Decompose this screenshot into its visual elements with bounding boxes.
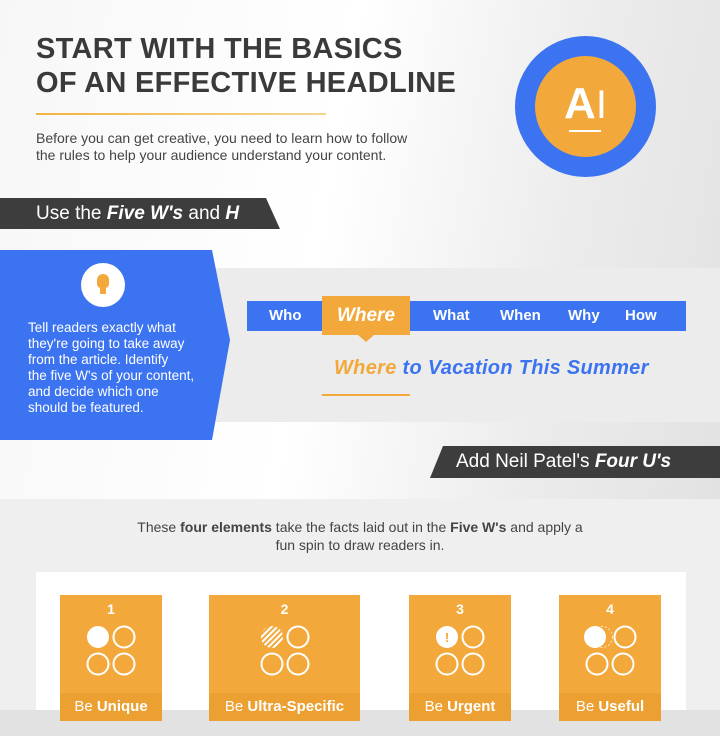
card 2: 2 <box>281 601 288 617</box>
four U's intro: These four elements take the facts laid out in the Five W's and apply a <box>137 519 583 535</box>
card 4 <box>559 595 661 721</box>
intro text: Before you can get creative, you need to learn how to follow <box>36 130 407 146</box>
tip text: the five W's of your content, <box>28 368 194 383</box>
card 4: 4 <box>606 601 614 617</box>
title <box>36 33 456 99</box>
card 1: Be Unique <box>74 698 148 715</box>
banner: Four U's <box>430 446 720 478</box>
icon: A text cursor: AI <box>564 79 607 128</box>
card 3: 3 <box>456 601 464 617</box>
four U's intro <box>137 519 583 553</box>
tip text: Tell readers exactly what <box>28 320 176 335</box>
white panel <box>36 572 686 712</box>
card 3: ! <box>445 630 449 645</box>
icon: A text cursor <box>515 36 656 177</box>
tip text: and decide which one <box>28 384 159 399</box>
tab bar: What <box>433 307 470 324</box>
gray section <box>0 499 720 736</box>
card 1 <box>60 595 162 721</box>
intro text: the rules to help your audience understand your content. <box>36 147 386 163</box>
card 3: Be Urgent <box>425 698 495 715</box>
banner: Five W's <box>0 198 280 229</box>
title: START WITH THE BASICS <box>36 33 403 65</box>
icon: lightbulb <box>81 263 125 307</box>
card 2: Be Ultra-Specific <box>225 698 344 715</box>
tip text: they're going to take away <box>28 336 184 351</box>
tab bar <box>247 301 686 331</box>
intro text <box>36 130 408 163</box>
card 3 <box>409 595 511 721</box>
panel: blue tip <box>0 250 232 440</box>
tip text: should be featured. <box>28 400 144 415</box>
tab bar: Why <box>568 307 600 324</box>
active tab: Where: Where <box>337 305 395 326</box>
banner: Five W's: Use the Five W's and H <box>36 203 239 224</box>
active tab: Where <box>322 296 410 342</box>
card 1: 1 <box>107 601 115 617</box>
gray band <box>210 268 720 422</box>
tip text <box>28 322 193 412</box>
tab bar: Who <box>269 307 301 324</box>
card 4: Be Useful <box>576 698 644 715</box>
tab bar: When <box>500 307 541 324</box>
tip text: from the article. Identify <box>28 352 168 367</box>
example headline: Where to Vacation This Summer <box>334 357 649 379</box>
tab bar: How <box>625 307 657 324</box>
four U's intro: fun spin to draw readers in. <box>276 537 444 553</box>
title: OF AN EFFECTIVE HEADLINE <box>36 67 456 99</box>
banner: Four U's: Add Neil Patel's Four U's <box>456 451 671 472</box>
card 2 <box>209 595 360 721</box>
